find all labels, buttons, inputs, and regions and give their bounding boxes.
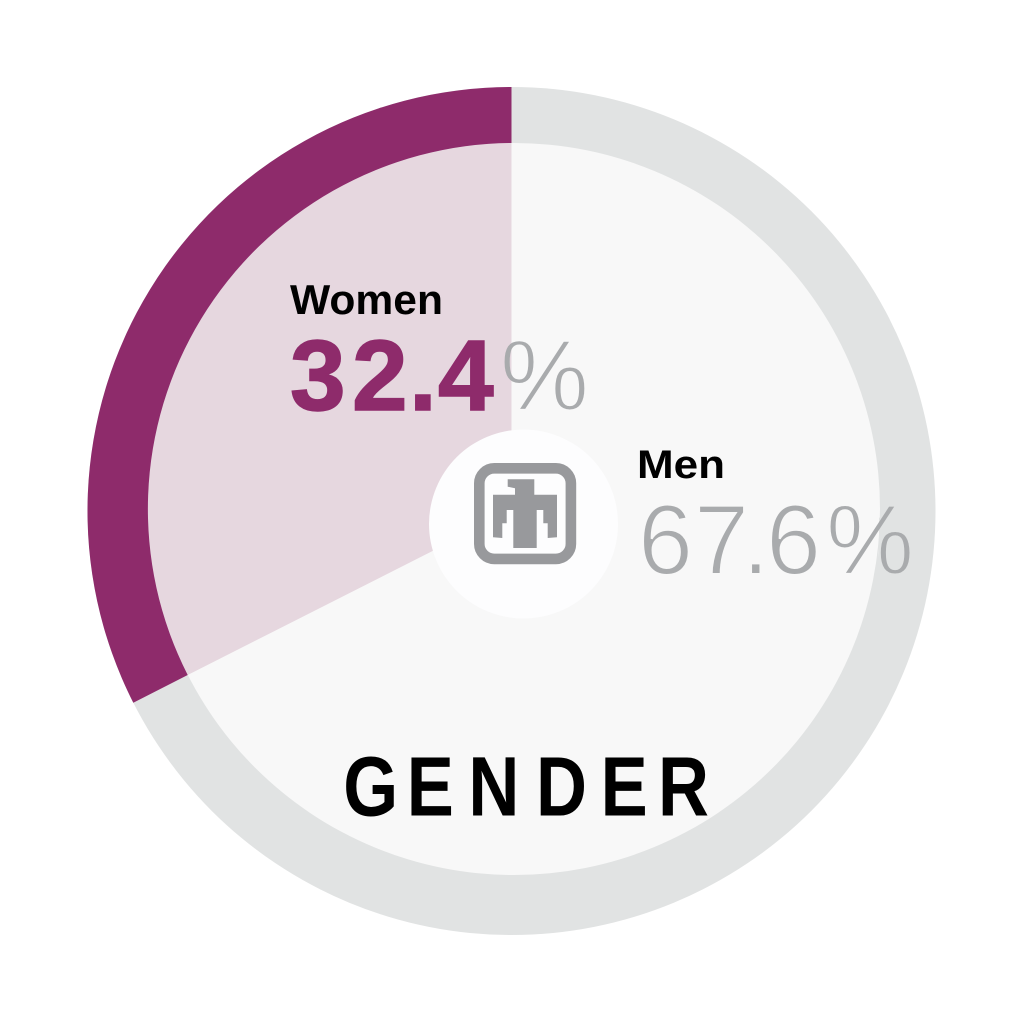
icon: thunderbird logo [479, 468, 571, 559]
title: GENDER: G [343, 741, 398, 834]
center white circle [429, 430, 618, 618]
value: 32.4: 4 [438, 320, 494, 432]
value: 32.4: 2 [352, 320, 408, 432]
title: GENDER: E [407, 741, 454, 834]
logo bird [493, 479, 557, 548]
logo frame [479, 468, 571, 559]
men inner area [148, 143, 880, 875]
label: Women: Women [290, 276, 443, 323]
title: GENDER: N [468, 741, 519, 834]
value: 67.6 percent: 7 [694, 484, 749, 595]
chart: gender donut [87, 87, 935, 935]
men ring [88, 87, 936, 935]
title: GENDER: E [601, 741, 648, 834]
label: Men: Men [637, 443, 725, 487]
title: GENDER: R [658, 741, 709, 834]
value: 32.4: . [409, 320, 437, 432]
women inner sector [148, 143, 511, 675]
value: 67.6 percent: 6 [638, 484, 693, 595]
value: 67.6 percent: % [826, 484, 914, 595]
value: 67.6 percent: . [742, 484, 770, 595]
women ring segment [87, 87, 511, 703]
value: 67.6 percent: 6 [766, 484, 821, 595]
title: GENDER: D [536, 741, 587, 834]
value: 32.4: 3 [290, 320, 346, 432]
percent sign women: % [500, 320, 589, 432]
